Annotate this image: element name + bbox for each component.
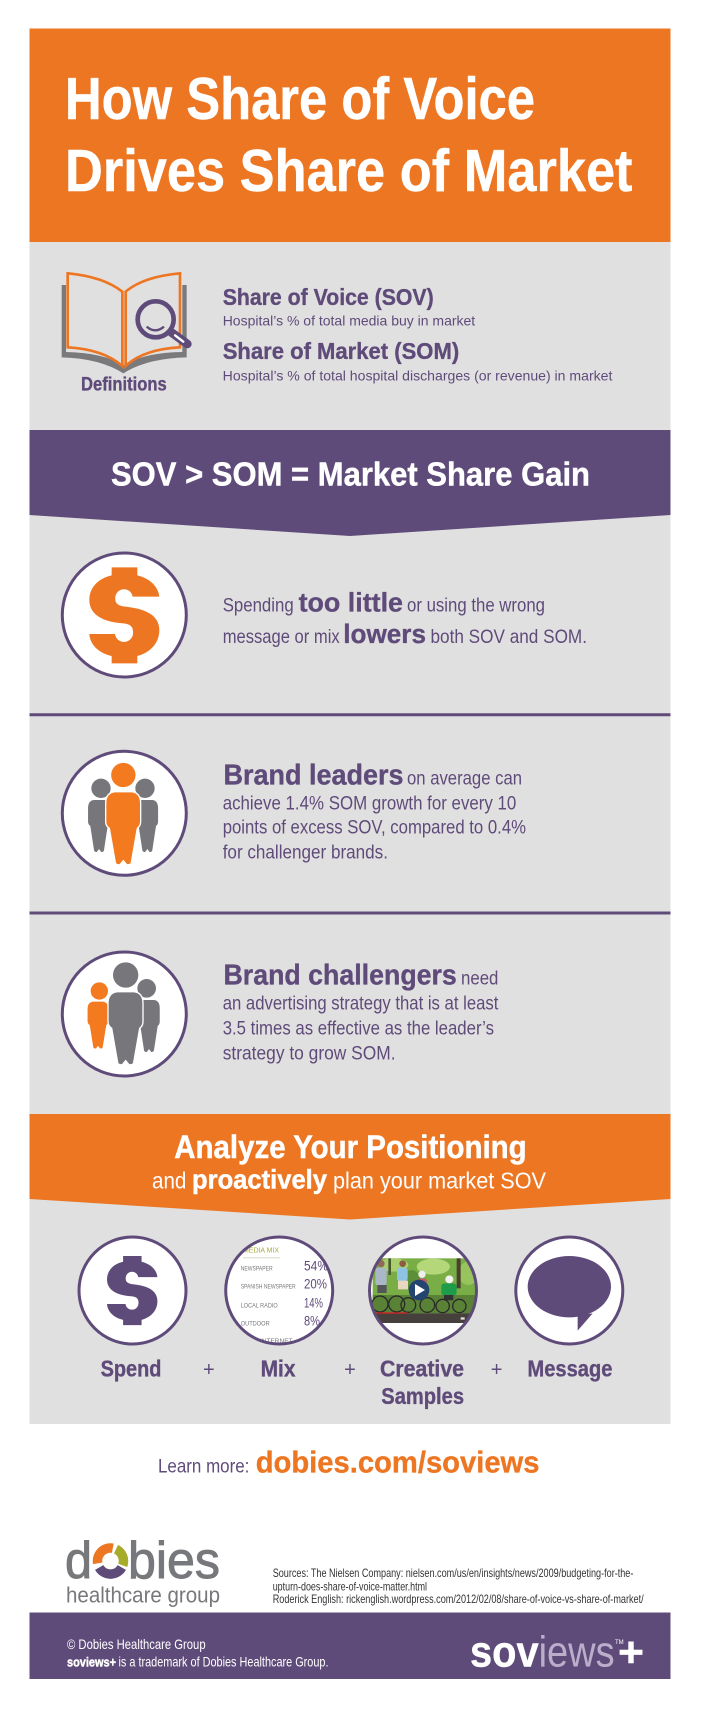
footer bar: sov bbox=[470, 1628, 539, 1676]
banner: analyze your positioning bbox=[30, 1114, 670, 1220]
text block: brand leaders: points of excess SOV, compared to 0.4% bbox=[223, 816, 526, 838]
label row: spend + mix + creative samples + message bbox=[101, 1356, 612, 1409]
text block: brand challengers: need bbox=[461, 968, 498, 990]
call to action: learn more: dobies.com/soviews bbox=[256, 1444, 539, 1480]
text block: definitions: Hospital’s % of total media buy in market bbox=[223, 313, 475, 329]
text block: sources bbox=[273, 1566, 644, 1606]
text block: brand leaders: for challenger brands. bbox=[223, 841, 388, 863]
footer bar: TM bbox=[615, 1640, 624, 1646]
icon: media mix table bbox=[224, 1236, 334, 1346]
text block: brand leaders: on average can bbox=[407, 768, 522, 790]
banner: analyze your positioning: and bbox=[152, 1168, 186, 1194]
title banner bbox=[30, 28, 670, 242]
text block: brand challengers: strategy to grow SOM. bbox=[223, 1042, 396, 1064]
label: Definitions: Definitions bbox=[81, 374, 167, 396]
logo: dobies healthcare group: healthcare group bbox=[66, 1582, 220, 1608]
label row: spend + mix + creative samples + message: + bbox=[203, 1359, 215, 1381]
call to action: learn more: Learn more: bbox=[158, 1456, 249, 1478]
banner: analyze your positioning: plan your market SOV bbox=[333, 1168, 547, 1194]
text block: brand leaders bbox=[223, 760, 526, 863]
icon: speech bubble bbox=[516, 1237, 623, 1344]
label row: spend + mix + creative samples + message: Samples bbox=[381, 1383, 464, 1409]
icon: media mix table: MEDIA MIX bbox=[243, 1246, 279, 1255]
banner: analyze your positioning: proactively bbox=[192, 1164, 327, 1194]
text block: spending too little: or using the wrong bbox=[407, 594, 545, 616]
icon: media mix table: 54% bbox=[304, 1259, 328, 1274]
text block: brand challengers bbox=[223, 960, 499, 1064]
footer bar: © Dobies Healthcare Group bbox=[67, 1636, 206, 1652]
footer bar: soviews+ bbox=[67, 1656, 116, 1670]
icon: media mix table: 20% bbox=[304, 1277, 327, 1292]
icon: media mix table: SPANISH NEWSPAPER bbox=[241, 1284, 296, 1291]
panel: grey background bbox=[30, 242, 670, 1424]
icon: media mix table: 8% bbox=[304, 1314, 320, 1329]
text block: spending too little bbox=[223, 587, 587, 649]
banner: analyze your positioning: Analyze Your Positioning bbox=[174, 1129, 527, 1165]
footer bar: iews bbox=[539, 1628, 615, 1676]
label row: spend + mix + creative samples + message: Creative bbox=[380, 1356, 464, 1382]
icon: media mix table: 14% bbox=[304, 1296, 323, 1311]
icon: spend dollar bbox=[79, 1237, 186, 1344]
icon: media mix table: LOCAL RADIO bbox=[241, 1303, 278, 1310]
icon: creative video thumbnail bbox=[368, 1236, 478, 1346]
text block: definitions bbox=[223, 284, 612, 384]
icon: media mix table: NEWSPAPER bbox=[241, 1266, 273, 1273]
text block: definitions: Share of Market (SOM) bbox=[223, 338, 459, 364]
text block: brand leaders: Brand leaders bbox=[224, 760, 404, 792]
banner: SOV > SOM bbox=[30, 430, 670, 536]
title banner: Drives Share of Market bbox=[65, 138, 632, 204]
text block: definitions: Share of Voice (SOV) bbox=[223, 284, 434, 310]
banner: SOV > SOM: SOV > SOM = Market Share Gain bbox=[111, 457, 590, 494]
footer bar: is a trademark of Dobies Healthcare Group. bbox=[118, 1654, 328, 1670]
text block: spending too little: message or mix bbox=[223, 626, 340, 648]
label row: spend + mix + creative samples + message: + bbox=[491, 1359, 502, 1381]
text block: spending too little: too little bbox=[299, 587, 403, 617]
icon: book with magnifier bbox=[62, 273, 187, 373]
footer bar bbox=[30, 1612, 670, 1679]
footer bar: + bbox=[618, 1628, 644, 1676]
logo: dobies healthcare group: bies bbox=[128, 1532, 220, 1590]
text block: brand challengers: an advertising strategy that is at least bbox=[223, 992, 499, 1014]
logo: dobies healthcare group bbox=[65, 1532, 220, 1608]
text block: sources: upturn-does-share-of-voice-matter.html bbox=[273, 1579, 427, 1593]
text block: definitions: Hospital’s % of total hospital discharges (or revenue) in market bbox=[223, 368, 612, 384]
label row: spend + mix + creative samples + message: Mix bbox=[261, 1356, 296, 1382]
label row: spend + mix + creative samples + message: Message bbox=[528, 1356, 612, 1382]
icon: brand challenger people bbox=[62, 952, 186, 1076]
icon: orange dollar in circle bbox=[62, 553, 186, 677]
title banner: How Share of Voice bbox=[65, 66, 535, 132]
text block: spending too little: Spending bbox=[223, 594, 294, 616]
text block: spending too little: lowers bbox=[343, 619, 426, 649]
label row: spend + mix + creative samples + message: Spend bbox=[101, 1356, 161, 1382]
logo: dobies healthcare group: d bbox=[65, 1532, 92, 1590]
text block: brand leaders: achieve 1.4% SOM growth for every 10 bbox=[223, 792, 516, 814]
icon: media mix table: OUTDOOR bbox=[241, 1321, 270, 1328]
text block: brand challengers: 3.5 times as effective as the leader’s bbox=[223, 1017, 494, 1039]
text block: brand challengers: Brand challengers bbox=[224, 960, 457, 992]
icon: brand leader people bbox=[62, 751, 186, 875]
icon: media mix table: INTERNET bbox=[260, 1338, 293, 1345]
text block: spending too little: both SOV and SOM. bbox=[430, 626, 587, 648]
label row: spend + mix + creative samples + message: + bbox=[344, 1359, 356, 1381]
